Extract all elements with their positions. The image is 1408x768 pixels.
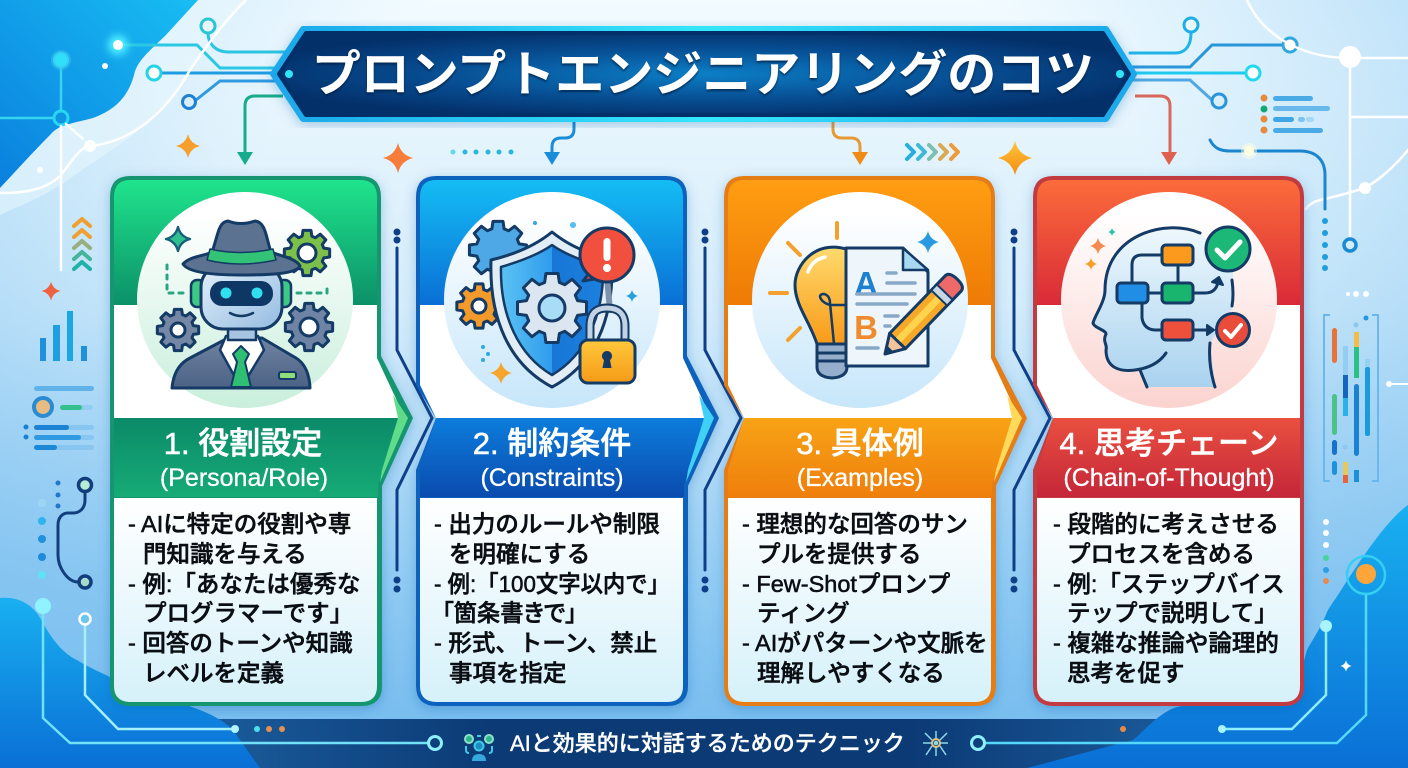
panel: card 2 constraints: (Constraints) xyxy=(480,464,624,492)
panel: card 1 persona: (Persona/Role) xyxy=(160,464,328,492)
text block: card 4 bullets: テップで説明して」 xyxy=(1067,600,1278,626)
icon: bulb document pencil: A xyxy=(854,265,878,302)
dots: teal row xyxy=(450,150,514,154)
star: orange xyxy=(383,143,413,173)
list icon: left side xyxy=(24,386,94,450)
text block: card 4 bullets: 思考を促す xyxy=(1067,660,1184,686)
bar chart: left side xyxy=(40,311,87,361)
icon: robot with hat xyxy=(157,221,333,388)
text block: card 2 bullets: - 例:「100文字以内で」 xyxy=(434,571,670,597)
text block: card 4 bullets: - 例:「ステップバイス xyxy=(1053,571,1285,597)
text block: card 4 bullets: - 段階的に考えさせる xyxy=(1053,511,1279,537)
icon: footer people xyxy=(465,735,493,761)
panel: card 4 chain of thought xyxy=(1033,176,1304,706)
text block: card 4 bullets: プロセスを含める xyxy=(1067,541,1255,567)
text block: card 2 bullets: - 出力のルールや制限 xyxy=(434,511,660,537)
panel: card 4 chain of thought: (Chain-of-Thought) xyxy=(1063,464,1275,492)
circuit: bottom right xyxy=(972,556,1385,750)
text block: card 1 bullets: レベルを定義 xyxy=(143,660,284,686)
text block: card 1 bullets: - 例:「あなたは優秀な xyxy=(128,571,360,597)
bar chart: right side xyxy=(1324,315,1408,483)
text block: card 3 bullets xyxy=(742,510,988,686)
panel: card 3 examples: (Examples) xyxy=(797,464,923,492)
text block: card 3 bullets: - 理想的な回答のサン xyxy=(742,510,968,537)
text block: card 3 bullets: プルを提供する xyxy=(757,541,922,567)
panel: card 3 examples: 3. 具体例 xyxy=(796,426,924,461)
text block: card 1 bullets xyxy=(128,511,360,686)
title banner xyxy=(273,29,1134,119)
text block: card 4 bullets xyxy=(1053,511,1285,686)
icon: shield gears lock xyxy=(457,221,638,387)
icon: footer hub xyxy=(923,731,948,756)
star: gold xyxy=(998,141,1032,175)
text block: card 1 bullets: プログラマーです」 xyxy=(143,600,353,626)
chevrons: left side xyxy=(74,219,90,269)
text block: card 2 bullets: 事項を指定 xyxy=(449,660,566,686)
text block: card 2 bullets xyxy=(434,511,670,686)
icon: bulb document pencil: B xyxy=(854,309,878,346)
icon: bulb document pencil xyxy=(770,223,965,378)
panel: card 2 constraints xyxy=(416,176,719,706)
panel: card 4 chain of thought: 4. 思考チェーン xyxy=(1060,426,1278,461)
text block: card 1 bullets: - 回答のトーンや知識 xyxy=(128,629,353,656)
circuit: left lower xyxy=(38,478,92,588)
text block: card 2 bullets: 「箇条書きで」 xyxy=(442,600,577,626)
text block: card 2 bullets: を明確にする xyxy=(449,541,590,567)
small list icon: top right xyxy=(1260,94,1330,134)
arrow: green xyxy=(237,96,283,165)
star: left red xyxy=(42,282,60,300)
text block: card 3 bullets: ティング xyxy=(757,600,850,626)
text block: card 1 bullets: 門知識を与える xyxy=(143,541,307,567)
text block: card 3 bullets: - Few-Shotプロンプ xyxy=(742,571,951,597)
circuit lines: top left xyxy=(0,0,285,270)
circuit lines: top right xyxy=(1130,0,1408,251)
panel: card 1 persona: 1. 役割設定 xyxy=(164,426,322,461)
card separators xyxy=(395,230,1050,591)
circuit: bottom left xyxy=(35,598,442,750)
text block: card 3 bullets: 理解しやすくなる xyxy=(757,660,945,686)
text block: card 4 bullets: - 複雑な推論や論理的 xyxy=(1053,630,1279,656)
text block: card 2 bullets: - 形式、トーン、禁止 xyxy=(434,630,657,656)
arrow: orange xyxy=(833,122,868,165)
text block: card 1 bullets: - AIに特定の役割や専 xyxy=(128,511,351,537)
star: orange small xyxy=(176,134,200,158)
text block: card 3 bullets: - AIがパターンや文脈を xyxy=(742,630,988,656)
panel: card 1 persona xyxy=(110,176,413,706)
panel: card 2 constraints: 2. 制約条件 xyxy=(473,426,631,461)
dots: right column xyxy=(1322,218,1369,584)
icon: head flowchart xyxy=(1085,227,1250,387)
footer text: AIと効果的に対話するためのテクニック xyxy=(510,731,905,756)
chevrons: row xyxy=(907,145,958,159)
arrow: blue xyxy=(544,122,574,165)
arrow: red xyxy=(1135,96,1177,165)
panel: card 3 examples xyxy=(724,176,1027,706)
title text: プロンプトエンジニアリングのコツ xyxy=(312,48,1094,102)
